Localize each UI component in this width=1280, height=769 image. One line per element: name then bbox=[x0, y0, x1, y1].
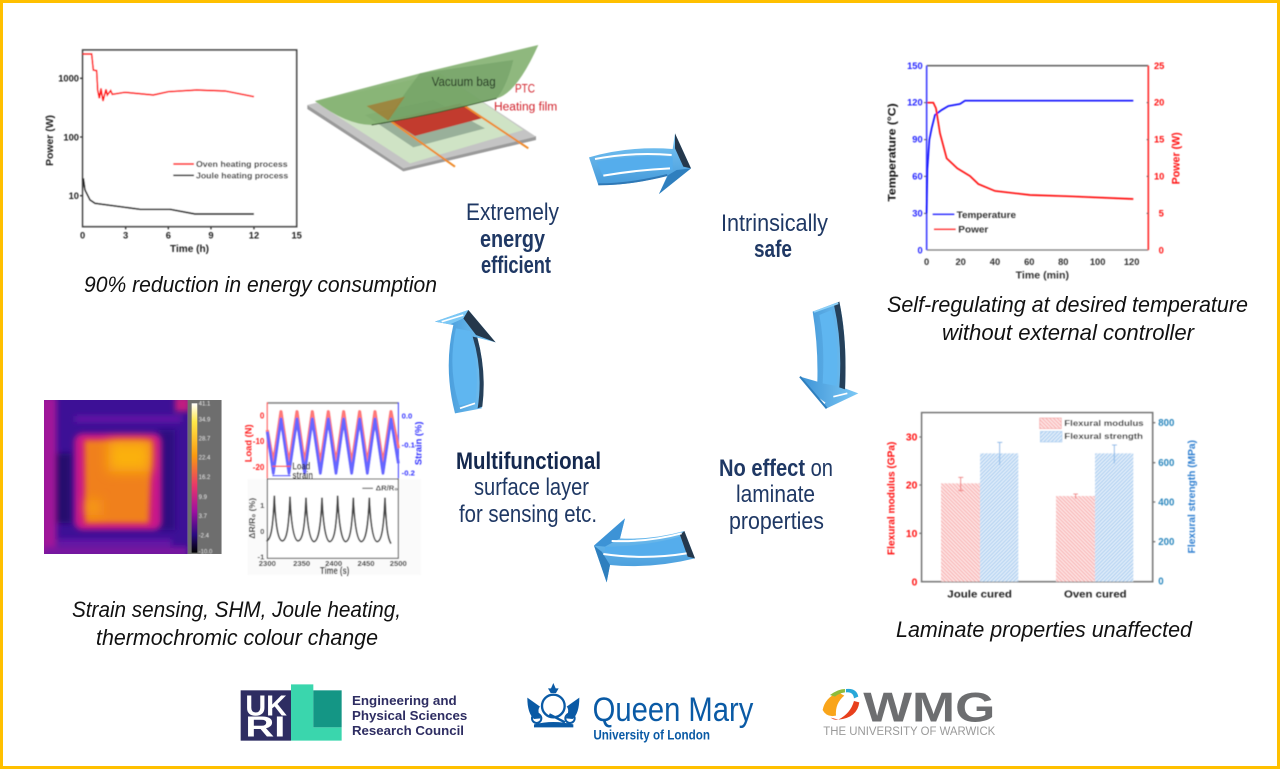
text block: extremely energy efficient bbox=[466, 199, 559, 279]
logo: Queen Mary University of London bbox=[527, 683, 754, 743]
chart: load, strain and resistance change: strain bbox=[292, 471, 313, 482]
chart: power versus time: 0 bbox=[80, 231, 85, 241]
chart: flexural properties bar chart: 200 bbox=[1158, 537, 1174, 548]
text block: multifunctional surface layer bbox=[456, 448, 601, 528]
chart: load, strain and resistance change: 0 bbox=[260, 411, 265, 420]
caption: laminate properties: Laminate properties unaffected bbox=[896, 617, 1193, 642]
chart: power versus time: 10 bbox=[69, 191, 79, 201]
chart: power versus time: 15 bbox=[291, 231, 302, 241]
chart: load, strain and resistance change: 1 bbox=[260, 501, 265, 510]
chart: flexural properties bar chart: Flexural modulus bbox=[1064, 418, 1144, 428]
logo: WMG University of Warwick: WMG bbox=[863, 684, 995, 731]
image: thermal camera map: -10.0 bbox=[199, 549, 213, 555]
chart: temperature and power versus time: 5 bbox=[1159, 209, 1164, 219]
caption: strain sensing bbox=[72, 597, 401, 650]
chart: temperature and power versus time: 0 bbox=[924, 257, 929, 267]
text block: no effect on laminate properties: properties bbox=[729, 508, 824, 535]
chart: load, strain and resistance change: -1 bbox=[258, 552, 265, 561]
chart: flexural properties bar chart: Flexural strength (MPa) bbox=[1187, 440, 1198, 553]
chart: power versus time bbox=[45, 50, 302, 255]
text block: no effect on laminate properties: No effect on bbox=[719, 455, 833, 482]
chart: temperature and power versus time: 10 bbox=[1154, 172, 1164, 182]
chart: temperature and power versus time: 20 bbox=[955, 257, 966, 267]
chart: power versus time: 100 bbox=[63, 132, 79, 142]
caption: self-regulating: without external controller bbox=[942, 320, 1195, 345]
chart: temperature and power versus time: 120 bbox=[907, 98, 923, 108]
text block: extremely energy efficient: Extremely bbox=[466, 199, 559, 226]
caption: self-regulating: Self-regulating at desired temperature bbox=[887, 292, 1248, 317]
chart: load, strain and resistance change bbox=[244, 402, 424, 577]
chart: flexural properties bar chart: Flexural strength bbox=[1064, 431, 1143, 441]
arrow: right bbox=[589, 133, 691, 194]
text block: multifunctional surface layer: surface layer bbox=[474, 474, 589, 501]
chart: load, strain and resistance change: 2300 bbox=[259, 559, 276, 568]
chart: load, strain and resistance change: 0.0 bbox=[402, 412, 412, 421]
image: thermal camera map: 34.9 bbox=[199, 417, 211, 423]
text block: extremely energy efficient: efficient bbox=[481, 252, 551, 279]
text block: multifunctional surface layer: for sensing etc. bbox=[459, 501, 597, 528]
logo: WMG University of Warwick bbox=[823, 684, 996, 738]
logo: UKRI EPSRC bbox=[241, 684, 467, 743]
diagram: vacuum bag and PTC heating film: PTC bbox=[515, 82, 535, 96]
logo: UKRI EPSRC: RI bbox=[245, 711, 285, 743]
caption: strain sensing: thermochromic colour change bbox=[96, 625, 378, 650]
chart: load, strain and resistance change: 0 bbox=[260, 527, 264, 536]
caption: strain sensing: Strain sensing, SHM, Joule heating, bbox=[72, 597, 401, 622]
chart: temperature and power versus time: Temperature bbox=[957, 210, 1016, 220]
caption: energy consumption: 90% reduction in energy consumption bbox=[84, 272, 437, 297]
chart: temperature and power versus time: 60 bbox=[1024, 257, 1035, 267]
chart: flexural properties bar chart: 0 bbox=[1158, 576, 1164, 587]
image: thermal camera map: 16.2 bbox=[199, 475, 211, 481]
chart: temperature and power versus time: 0 bbox=[1159, 245, 1164, 255]
chart: flexural properties bar chart: 800 bbox=[1158, 418, 1174, 429]
chart: flexural properties bar chart bbox=[887, 413, 1198, 600]
chart: flexural properties bar chart: 0 bbox=[912, 577, 918, 588]
chart: power versus time: Time (h) bbox=[170, 244, 209, 255]
image: thermal camera map: -2.4 bbox=[199, 533, 210, 539]
text block: intrinsically safe bbox=[721, 210, 828, 263]
image: thermal camera map: 9.9 bbox=[199, 495, 208, 501]
chart: temperature and power versus time: 0 bbox=[917, 245, 923, 255]
chart: load, strain and resistance change: -10 bbox=[253, 437, 265, 446]
chart: load, strain and resistance change: Load bbox=[292, 462, 310, 473]
chart: flexural properties bar chart: 10 bbox=[906, 529, 918, 540]
chart: temperature and power versus time: 40 bbox=[990, 257, 1000, 267]
chart: power versus time: Joule heating process bbox=[196, 170, 289, 180]
chart: temperature and power versus time: 80 bbox=[1058, 257, 1069, 267]
logo: UKRI EPSRC: UK bbox=[245, 691, 287, 723]
chart: load, strain and resistance change: 2450 bbox=[357, 559, 375, 568]
chart: temperature and power versus time: Temperature (°C) bbox=[886, 103, 898, 202]
chart: temperature and power versus time: 150 bbox=[907, 61, 923, 71]
arrow: left bbox=[594, 518, 695, 582]
chart: load, strain and resistance change: ΔR/R₀ bbox=[376, 483, 398, 492]
chart: load, strain and resistance change: ΔR/R₀ (%) bbox=[247, 498, 257, 539]
chart: temperature and power versus time: 60 bbox=[912, 172, 923, 182]
diagram: vacuum bag and PTC heating film: Heating film bbox=[494, 100, 557, 114]
logo: UKRI EPSRC: Research Council bbox=[352, 724, 464, 738]
image: thermal camera map: 3.7 bbox=[199, 514, 208, 520]
chart: power versus time: Oven heating process bbox=[196, 159, 288, 169]
image: thermal camera map: 22.4 bbox=[199, 456, 211, 462]
image: thermal camera map: 28.7 bbox=[199, 437, 211, 443]
chart: flexural properties bar chart: Oven cured bbox=[1064, 589, 1127, 600]
chart: temperature and power versus time: Power (W) bbox=[1170, 132, 1182, 184]
arrow: up bbox=[435, 310, 496, 413]
logo: Queen Mary University of London: University of London bbox=[593, 727, 710, 743]
logo: Queen Mary University of London: Queen Mary bbox=[593, 691, 754, 729]
chart: flexural properties bar chart: Joule cured bbox=[947, 589, 1012, 600]
text block: intrinsically safe: safe bbox=[754, 236, 792, 263]
chart: temperature and power versus time: 100 bbox=[1090, 257, 1105, 267]
text block: intrinsically safe: Intrinsically bbox=[721, 210, 828, 237]
chart: flexural properties bar chart: Flexural modulus (GPa) bbox=[887, 442, 898, 555]
chart: power versus time: 9 bbox=[208, 231, 214, 241]
chart: temperature and power versus time: Time (min) bbox=[1016, 271, 1069, 282]
chart: flexural properties bar chart: 400 bbox=[1158, 497, 1174, 508]
chart: temperature and power versus time bbox=[886, 61, 1182, 282]
chart: load, strain and resistance change: Time (s) bbox=[320, 566, 349, 577]
chart: flexural properties bar chart: 600 bbox=[1158, 458, 1174, 469]
chart: power versus time: 1000 bbox=[58, 74, 79, 84]
chart: temperature and power versus time: 25 bbox=[1154, 61, 1164, 71]
logo: WMG University of Warwick: THE UNIVERSITY OF WARWICK bbox=[823, 725, 996, 738]
chart: power versus time: 3 bbox=[123, 231, 128, 241]
image: thermal camera map: 41.1 bbox=[199, 401, 211, 407]
chart: load, strain and resistance change: -0.2 bbox=[402, 469, 415, 478]
chart: load, strain and resistance change: Load (N) bbox=[244, 424, 254, 462]
text block: no effect on laminate properties bbox=[719, 455, 833, 535]
chart: temperature and power versus time: 120 bbox=[1124, 257, 1139, 267]
chart: load, strain and resistance change: -20 bbox=[253, 463, 265, 472]
text block: extremely energy efficient: energy bbox=[480, 226, 546, 253]
chart: load, strain and resistance change: 2350 bbox=[293, 559, 310, 568]
chart: load, strain and resistance change: 2400 bbox=[325, 559, 342, 568]
chart: flexural properties bar chart: 30 bbox=[906, 433, 918, 444]
bars: Joule and oven cured bbox=[941, 453, 1133, 582]
diagram: vacuum bag and PTC heating film bbox=[307, 45, 557, 171]
chart: flexural properties bar chart: 20 bbox=[906, 481, 918, 492]
chart: temperature and power versus time: Power bbox=[958, 225, 989, 235]
chart: power versus time: Power (W) bbox=[45, 115, 56, 166]
image: thermal camera map bbox=[40, 397, 222, 557]
chart: temperature and power versus time: 15 bbox=[1154, 135, 1164, 145]
diagram: vacuum bag and PTC heating film: Vacuum bag bbox=[432, 75, 496, 89]
arrow: down bbox=[800, 302, 858, 408]
chart: temperature and power versus time: 30 bbox=[912, 209, 923, 219]
chart: load, strain and resistance change: Strain (%) bbox=[414, 422, 424, 465]
text block: no effect on laminate properties: laminate bbox=[736, 481, 815, 508]
chart: power versus time: 12 bbox=[249, 231, 259, 241]
chart: temperature and power versus time: 90 bbox=[912, 135, 923, 145]
logo: UKRI EPSRC: Physical Sciences bbox=[352, 709, 467, 723]
caption: self-regulating bbox=[887, 292, 1248, 345]
chart: temperature and power versus time: 20 bbox=[1154, 98, 1164, 108]
chart: load, strain and resistance change: -0.1 bbox=[402, 441, 416, 450]
logo: UKRI EPSRC: Engineering and bbox=[352, 694, 457, 708]
chart: power versus time: 6 bbox=[166, 231, 171, 241]
chart: load, strain and resistance change: 2500 bbox=[390, 559, 407, 568]
text block: multifunctional surface layer: Multifunctional bbox=[456, 448, 601, 475]
